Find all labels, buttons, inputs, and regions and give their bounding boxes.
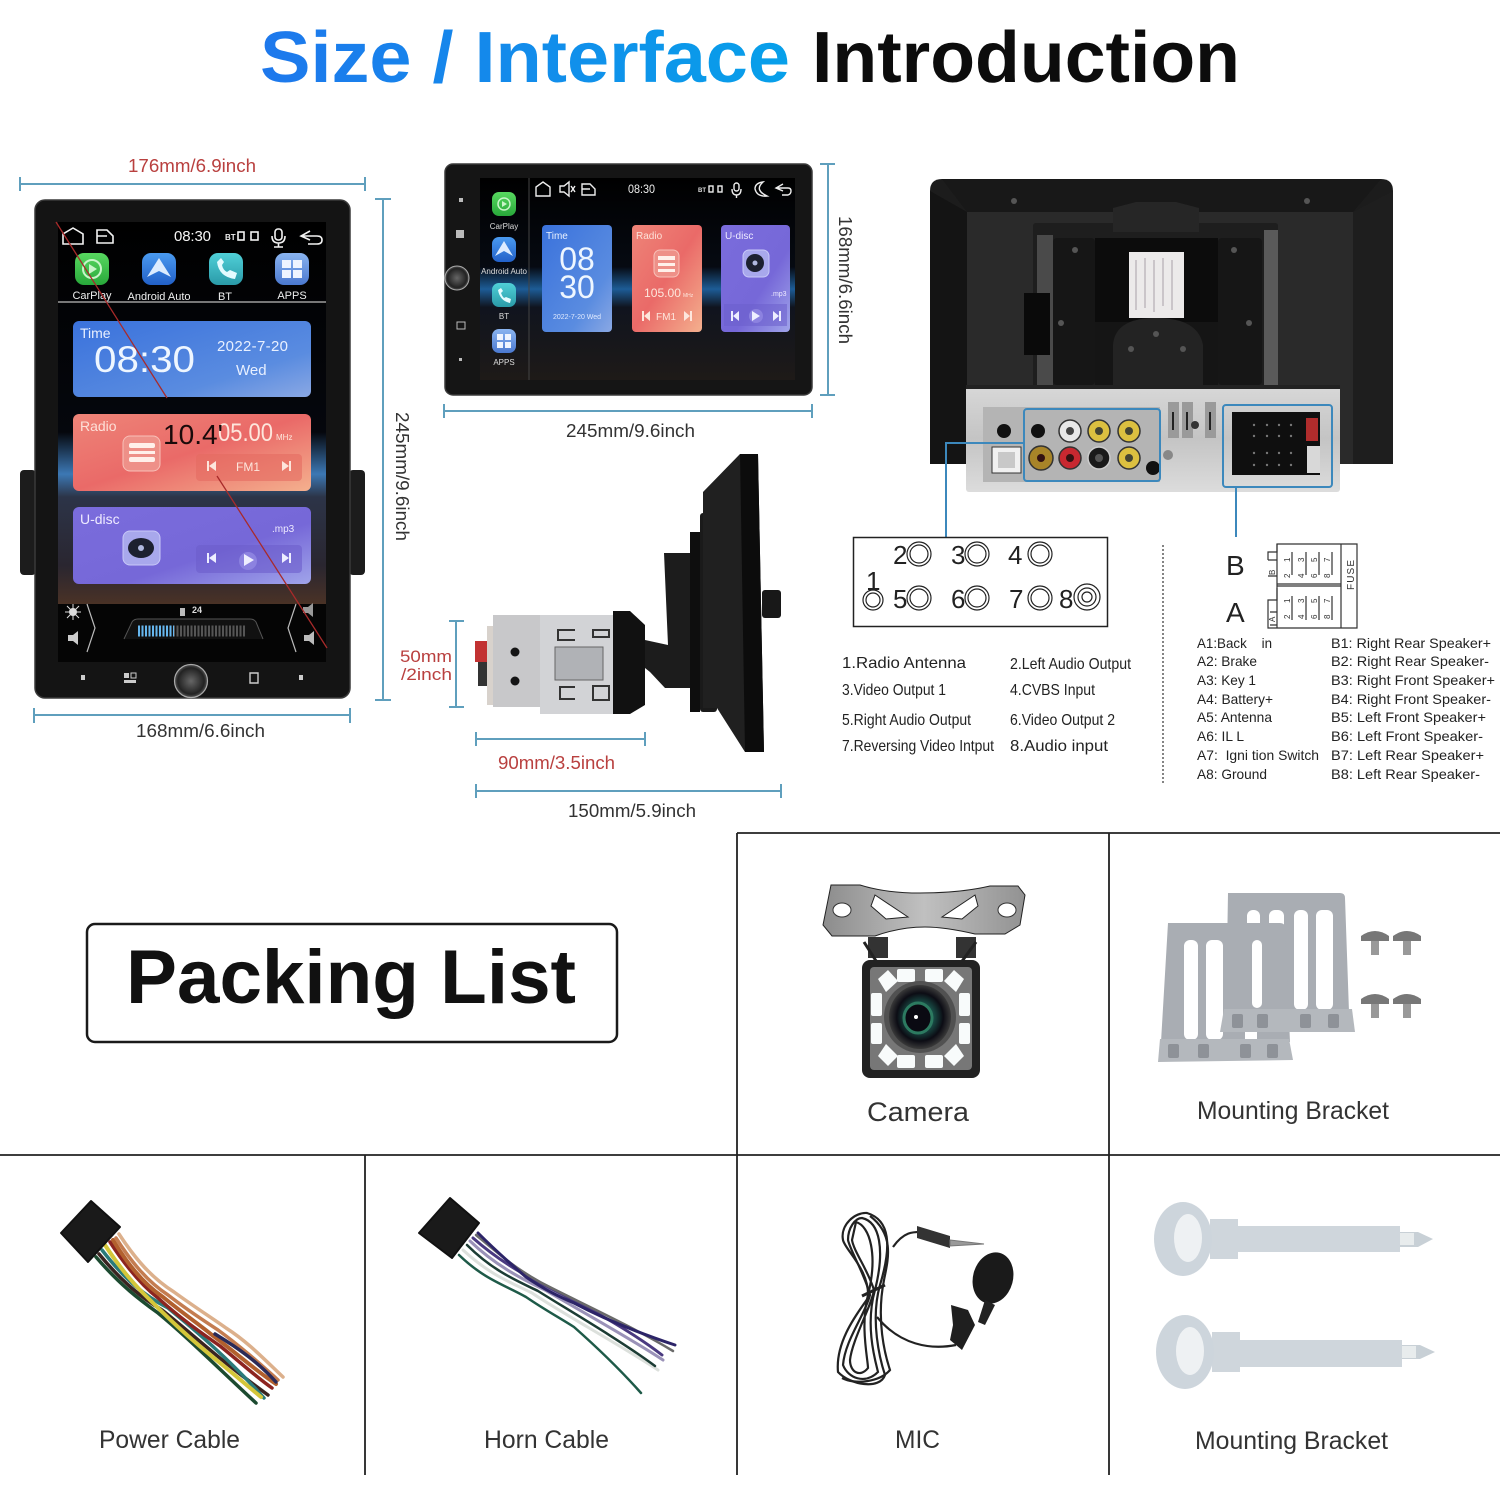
item: microphone: MIC	[895, 1426, 940, 1454]
status bar: 08:30	[174, 228, 211, 245]
text block: pin legend B: B8: Left Rear Speaker-	[1331, 766, 1480, 782]
card: time: 2022-7-20	[217, 338, 288, 355]
text block: port legend: 4.CVBS Input	[1010, 682, 1095, 699]
panel: RCA port diagram: 7	[1009, 584, 1023, 614]
panel: vertical screen dimensions: 245mm/9.6inch	[392, 412, 412, 541]
icon: app column: CarPlay	[490, 222, 518, 231]
dimension lines	[400, 621, 781, 821]
panel: ISO connector diagram: 3	[1297, 557, 1306, 562]
connectors: RCA ports	[992, 420, 1160, 475]
panel: ISO connector diagram: 2	[1283, 614, 1292, 619]
icon: app row: APPS	[277, 290, 307, 302]
control strip: 24	[192, 605, 202, 615]
card: u-disc	[73, 507, 311, 584]
icon: side knob and buttons	[445, 198, 469, 361]
card: radio: MHz	[683, 293, 694, 299]
card: radio: FM1	[656, 312, 676, 323]
card: radio: 105.00	[644, 286, 681, 300]
icon: coiled cable	[838, 1213, 956, 1384]
mount plate	[1011, 198, 1310, 385]
text block: port legend: 1.Radio Antenna	[842, 655, 966, 672]
heading: packing list	[87, 924, 617, 1042]
panel: ISO connector diagram: 5	[1310, 598, 1319, 603]
panel: horizontal screen dimensions: 245mm/9.6inch	[566, 421, 695, 441]
text block: pin legend A: A7: Igni tion Switch	[1197, 747, 1319, 763]
control strip	[65, 603, 314, 652]
icon: app row: BT	[218, 291, 232, 303]
icon: app column: BT	[499, 312, 509, 321]
panel: ISO connector diagram: 2	[1283, 573, 1292, 578]
panel: vertical screen dimensions	[20, 156, 412, 741]
title	[260, 18, 1240, 98]
dotted divider	[1162, 545, 1164, 785]
card: time	[542, 225, 612, 332]
text block: port legend: 3.Video Output 1	[842, 682, 946, 699]
text block: pin legend A: A1:Back in	[1197, 635, 1272, 651]
icon: wires	[96, 1234, 283, 1403]
item: camera	[823, 885, 1025, 1127]
card: radio	[73, 414, 311, 491]
card: u-disc: .mp3	[771, 291, 787, 298]
item: power cable: Power Cable	[99, 1426, 240, 1454]
icon: pin bottom	[1156, 1315, 1435, 1389]
device: horizontal screen head unit	[445, 164, 812, 395]
dimension lines: 90mm/3.5inch	[498, 753, 615, 773]
text block: pin legend A	[1197, 635, 1319, 782]
panel: ISO connector diagram: A	[1226, 597, 1245, 628]
item: horn cable	[419, 1198, 675, 1454]
card: time	[73, 321, 311, 397]
card: time: 08:30	[94, 339, 195, 380]
text block: port legend: 7.Reversing Video Intput	[842, 738, 994, 755]
icon: front bracket plate	[1161, 923, 1290, 1042]
icon: app column: Android Auto	[481, 267, 527, 276]
packing list grid lines	[0, 833, 1500, 1475]
status bar: BT	[225, 233, 236, 242]
card: time: 08	[559, 241, 595, 277]
icon: pin top	[1154, 1202, 1433, 1276]
dimension lines: 50mm	[400, 647, 452, 666]
icon: mounting plate	[823, 885, 1025, 964]
panel: side view	[400, 454, 781, 821]
title: Size / Interface	[260, 18, 790, 98]
text block: port legend: 5.Right Audio Output	[842, 712, 971, 729]
panel: ISO connector diagram: 4	[1297, 614, 1306, 619]
card: time: 30	[559, 269, 595, 305]
icon: plug	[917, 1226, 984, 1248]
panel: ISO connector diagram: 6	[1310, 573, 1319, 578]
panel: ISO connector diagram: FUSE	[1346, 560, 1357, 590]
item: horn cable: Horn Cable	[484, 1426, 609, 1454]
card: time: Wed	[236, 362, 267, 379]
icon: back bracket foot	[1220, 1009, 1355, 1032]
panel: ISO connector diagram: 1	[1283, 598, 1292, 603]
panel: ISO connector diagram: A	[1268, 616, 1277, 622]
card: time: Time	[80, 325, 111, 341]
item: power cable	[61, 1201, 283, 1454]
slots	[1168, 402, 1216, 438]
card: time: Time	[546, 231, 568, 242]
text block: port legend: 2.Left Audio Output	[1010, 656, 1131, 673]
card: u-disc: U-disc	[80, 511, 120, 527]
icon: volume knob	[174, 664, 208, 698]
card: radio: Radio	[80, 418, 117, 434]
card: u-disc: .mp3	[272, 524, 295, 535]
card: radio	[632, 225, 702, 332]
panel: ISO connector diagram: 7	[1323, 557, 1332, 562]
panel: ISO connector diagram: 4	[1297, 573, 1306, 578]
text block: port legend: 8.Audio input	[1010, 738, 1109, 755]
icon: app row: CarPlay	[72, 290, 112, 302]
text block: pin legend B: B2: Right Rear Speaker-	[1331, 653, 1489, 669]
text block: pin legend B	[1331, 635, 1495, 782]
item: microphone	[838, 1213, 1019, 1454]
text block: pin legend B: B3: Right Front Speaker+	[1331, 672, 1495, 688]
card: u-disc	[721, 225, 790, 332]
card: radio: 10.4'	[163, 419, 223, 450]
icon: app row: Android Auto	[128, 291, 190, 303]
panel: RCA port diagram: 2	[893, 540, 907, 570]
panel: RCA port diagram	[854, 538, 1108, 626]
text block: pin legend B: B5: Left Front Speaker+	[1331, 709, 1486, 725]
panel: ISO connector diagram: 8	[1323, 614, 1332, 619]
chassis metal plate	[946, 385, 1340, 537]
text block: pin legend A: A6: IL L	[1197, 728, 1244, 744]
icon: app column: APPS	[493, 358, 515, 367]
text block: port legend: 6.Video Output 2	[1010, 712, 1115, 729]
icon: back bracket plate	[1226, 893, 1349, 1012]
panel: RCA port diagram: 8	[1059, 584, 1073, 614]
status bar: 08:30	[628, 182, 655, 196]
icon: connector	[61, 1201, 120, 1262]
panel: RCA port diagram: 6	[951, 584, 965, 614]
panel: ISO connector diagram: 7	[1323, 598, 1332, 603]
panel: ISO connector diagram: B	[1226, 550, 1245, 581]
text block: pin legend A: A8: Ground	[1197, 766, 1267, 782]
panel: RCA port diagram: 3	[951, 540, 965, 570]
panel: ISO connector diagram	[1226, 544, 1357, 628]
diagonal red annotation lines	[56, 222, 327, 648]
card: time: 2022-7-20 Wed	[553, 314, 601, 321]
card: radio: MHz	[276, 433, 292, 442]
card: u-disc: U-disc	[725, 231, 753, 242]
panel: RCA port diagram: 1	[866, 566, 880, 596]
panel: RCA port diagram: 4	[1008, 540, 1022, 570]
icon: camera body and LEDs	[862, 960, 980, 1078]
icon: app column	[481, 192, 527, 367]
text block: pin legend B: B4: Right Front Speaker-	[1331, 691, 1491, 707]
icon: foam capsule and clip	[950, 1248, 1019, 1350]
title: Introduction	[812, 18, 1240, 98]
panel: vertical screen dimensions: 168mm/6.6inch	[136, 721, 265, 741]
panel: ISO connector diagram: 3	[1297, 598, 1306, 603]
panel: rear view	[930, 179, 1393, 537]
icon: connector	[419, 1198, 479, 1258]
panel: horizontal screen dimensions: 168mm/6.6inch	[835, 216, 855, 344]
text block: pin legend A: A5: Antenna	[1197, 709, 1272, 725]
card: radio: Radio	[636, 231, 663, 242]
panel: ISO connector diagram: 1	[1283, 557, 1292, 562]
item: mounting pins: Mounting Bracket	[1195, 1427, 1388, 1455]
device: side profile	[475, 454, 781, 752]
panel: horizontal screen dimensions	[444, 164, 855, 441]
item: mounting bracket with screws	[1158, 893, 1421, 1125]
text block: pin legend B: B1: Right Rear Speaker+	[1331, 635, 1491, 651]
item: mounting pins	[1154, 1202, 1435, 1455]
panel: RCA port diagram: 5	[893, 584, 907, 614]
status bar	[536, 182, 791, 198]
dimension lines: /2inch	[401, 665, 452, 684]
highlight boxes	[946, 405, 1332, 537]
icon: app row	[72, 253, 309, 303]
item: camera: Camera	[867, 1097, 970, 1127]
icon: screws	[1361, 931, 1421, 1018]
button row	[81, 673, 303, 683]
card: radio: 05.00	[218, 419, 273, 447]
panel: ISO connector diagram: 5	[1310, 557, 1319, 562]
text block: pin legend A: A2: Brake	[1197, 653, 1257, 669]
text block: pin legend B: B7: Left Rear Speaker+	[1331, 747, 1484, 763]
panel: ISO connector diagram: B	[1268, 570, 1277, 575]
text block: pin legend A: A3: Key 1	[1197, 672, 1256, 688]
text block: pin legend B: B6: Left Front Speaker-	[1331, 728, 1483, 744]
connector: ISO block	[1232, 412, 1320, 475]
panel: vertical screen dimensions: 176mm/6.9inch	[128, 156, 256, 176]
item: mounting bracket with screws: Mounting Bracket	[1197, 1097, 1389, 1125]
text block: port legend	[842, 655, 1131, 755]
status bar: BT	[698, 188, 706, 194]
status bar	[63, 228, 322, 247]
icon: front bracket foot	[1158, 1039, 1293, 1062]
heading: packing list: Packing List	[126, 935, 576, 1020]
text block: pin legend A: A4: Battery+	[1197, 691, 1273, 707]
card: radio: FM1	[236, 460, 260, 474]
dimension lines: 150mm/5.9inch	[568, 801, 696, 821]
icon: wires	[459, 1233, 675, 1393]
device: vertical screen head unit	[20, 200, 365, 698]
panel: ISO connector diagram: 6	[1310, 614, 1319, 619]
panel: ISO connector diagram: 8	[1323, 573, 1332, 578]
